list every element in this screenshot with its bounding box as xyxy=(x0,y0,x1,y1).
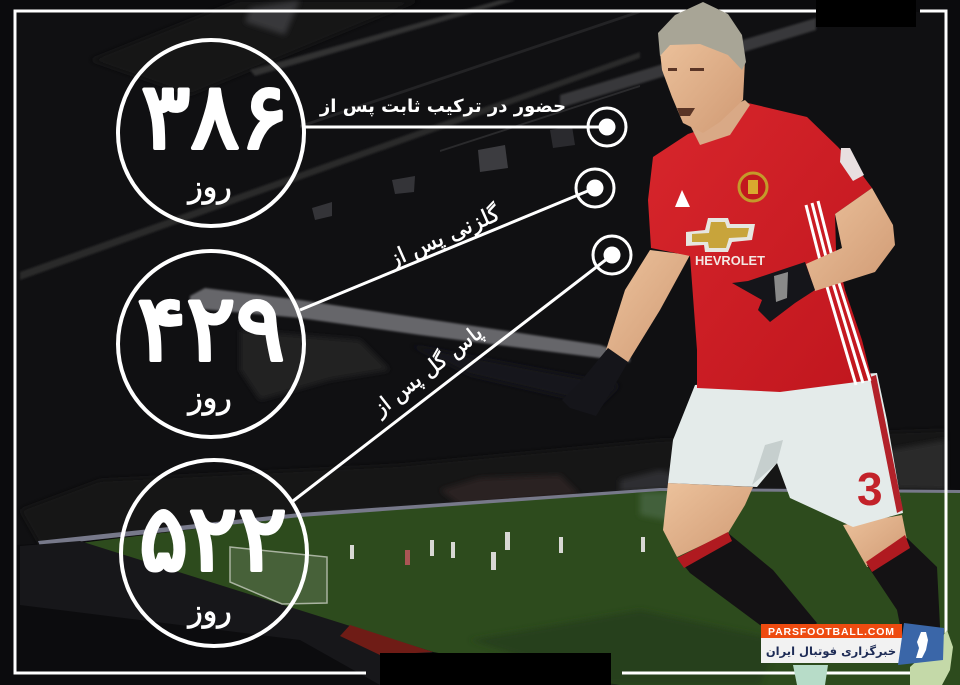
left glove xyxy=(562,348,628,416)
right glove xyxy=(732,262,815,322)
FA patch xyxy=(840,148,864,181)
front stand xyxy=(20,541,433,685)
stat 386 xyxy=(118,40,304,226)
hair xyxy=(658,2,746,70)
badge site name: PARSFOOTBALL.COM xyxy=(768,626,894,638)
number: ۴۲۹ xyxy=(137,275,285,382)
right arm xyxy=(806,188,895,291)
face xyxy=(660,35,745,133)
far sock xyxy=(867,538,940,650)
goal xyxy=(230,547,327,604)
neck xyxy=(690,100,750,145)
number: ۳۸۶ xyxy=(141,63,289,170)
circle xyxy=(118,40,304,226)
near sock xyxy=(678,533,817,640)
stat 522 xyxy=(121,460,307,646)
adidas logo xyxy=(675,190,690,207)
badge white strip xyxy=(761,638,902,663)
left arm xyxy=(606,250,690,362)
circle xyxy=(121,460,307,646)
badge blue icon xyxy=(898,623,944,665)
shirt sponsor xyxy=(686,218,765,268)
eyes and mouth xyxy=(668,68,704,116)
unit: روز xyxy=(186,170,232,205)
label 3: پاس گل پس از xyxy=(367,320,487,421)
crest xyxy=(739,173,767,201)
shirt stripes xyxy=(806,201,870,385)
advertising boards xyxy=(38,488,960,546)
label 1: حضور در ترکیب ثابت پس از xyxy=(319,96,566,117)
player photo xyxy=(562,2,953,685)
shirt xyxy=(648,103,872,392)
stat 429 xyxy=(118,251,304,437)
near boot xyxy=(793,665,828,685)
far boot xyxy=(910,630,953,685)
badge persian text: خبرگزاری فوتبال ایران xyxy=(766,644,896,659)
black tab bottom xyxy=(380,653,611,685)
pitch xyxy=(20,488,960,685)
badge orange strip xyxy=(761,624,902,638)
connector 1 xyxy=(305,108,626,146)
shirt sponsor: HEVROLET xyxy=(695,253,765,268)
circle xyxy=(118,251,304,437)
players on pitch xyxy=(350,532,645,570)
label 2: گلزنی پس از xyxy=(383,200,504,273)
unit: روز xyxy=(186,594,232,629)
near leg xyxy=(663,483,753,557)
source badge xyxy=(761,623,944,665)
black tab top xyxy=(816,0,916,27)
shorts xyxy=(668,373,903,527)
connector 3 xyxy=(293,236,631,501)
badge player icon xyxy=(916,632,928,658)
player photo: 3 xyxy=(857,463,883,515)
unit: روز xyxy=(186,381,232,416)
number: ۵۲۲ xyxy=(139,485,287,592)
connector 2 xyxy=(300,169,614,310)
far leg xyxy=(843,515,907,567)
